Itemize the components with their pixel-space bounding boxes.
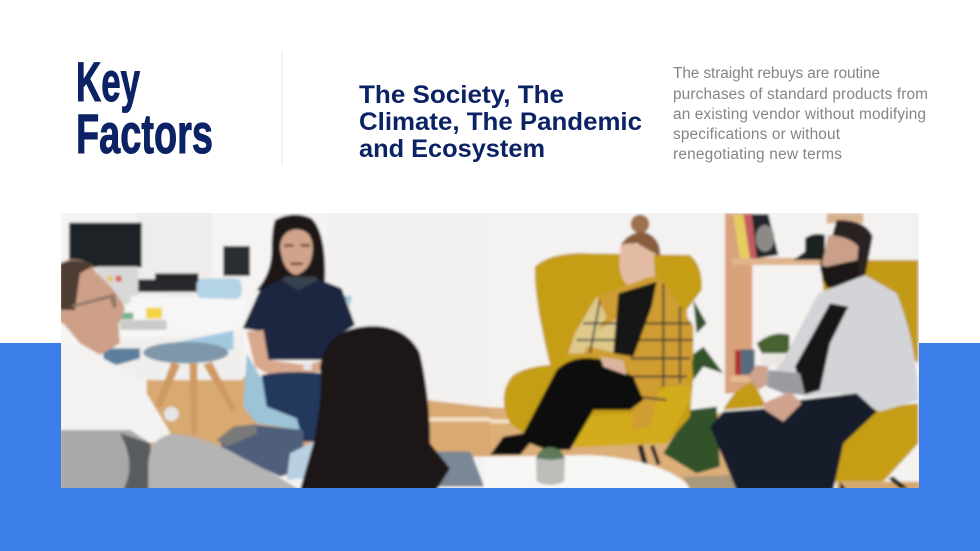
description text: renegotiating new terms	[673, 146, 842, 163]
right half of photo	[483, 210, 933, 492]
title	[76, 50, 213, 165]
title: Factors	[76, 102, 213, 165]
left half of photo	[60, 210, 490, 490]
right chair	[820, 260, 918, 363]
subheading	[359, 81, 642, 163]
blue band	[0, 343, 980, 551]
subheading: The Society, The	[359, 81, 564, 109]
side table and pot	[483, 455, 690, 492]
description text: The straight rebuys are routine	[673, 65, 880, 82]
description text: purchases of standard products from	[673, 86, 928, 103]
man in jacket	[820, 220, 873, 287]
subheading: Climate, The Pandemic	[359, 108, 642, 136]
description text: an existing vendor without modifying	[673, 106, 926, 123]
photo: team meeting in an office	[60, 210, 933, 492]
subheading: and Ecosystem	[359, 135, 545, 163]
title: Key	[76, 50, 140, 113]
description text: specifications or without	[673, 126, 841, 143]
description text	[673, 65, 928, 163]
plant behind chair	[663, 300, 723, 473]
